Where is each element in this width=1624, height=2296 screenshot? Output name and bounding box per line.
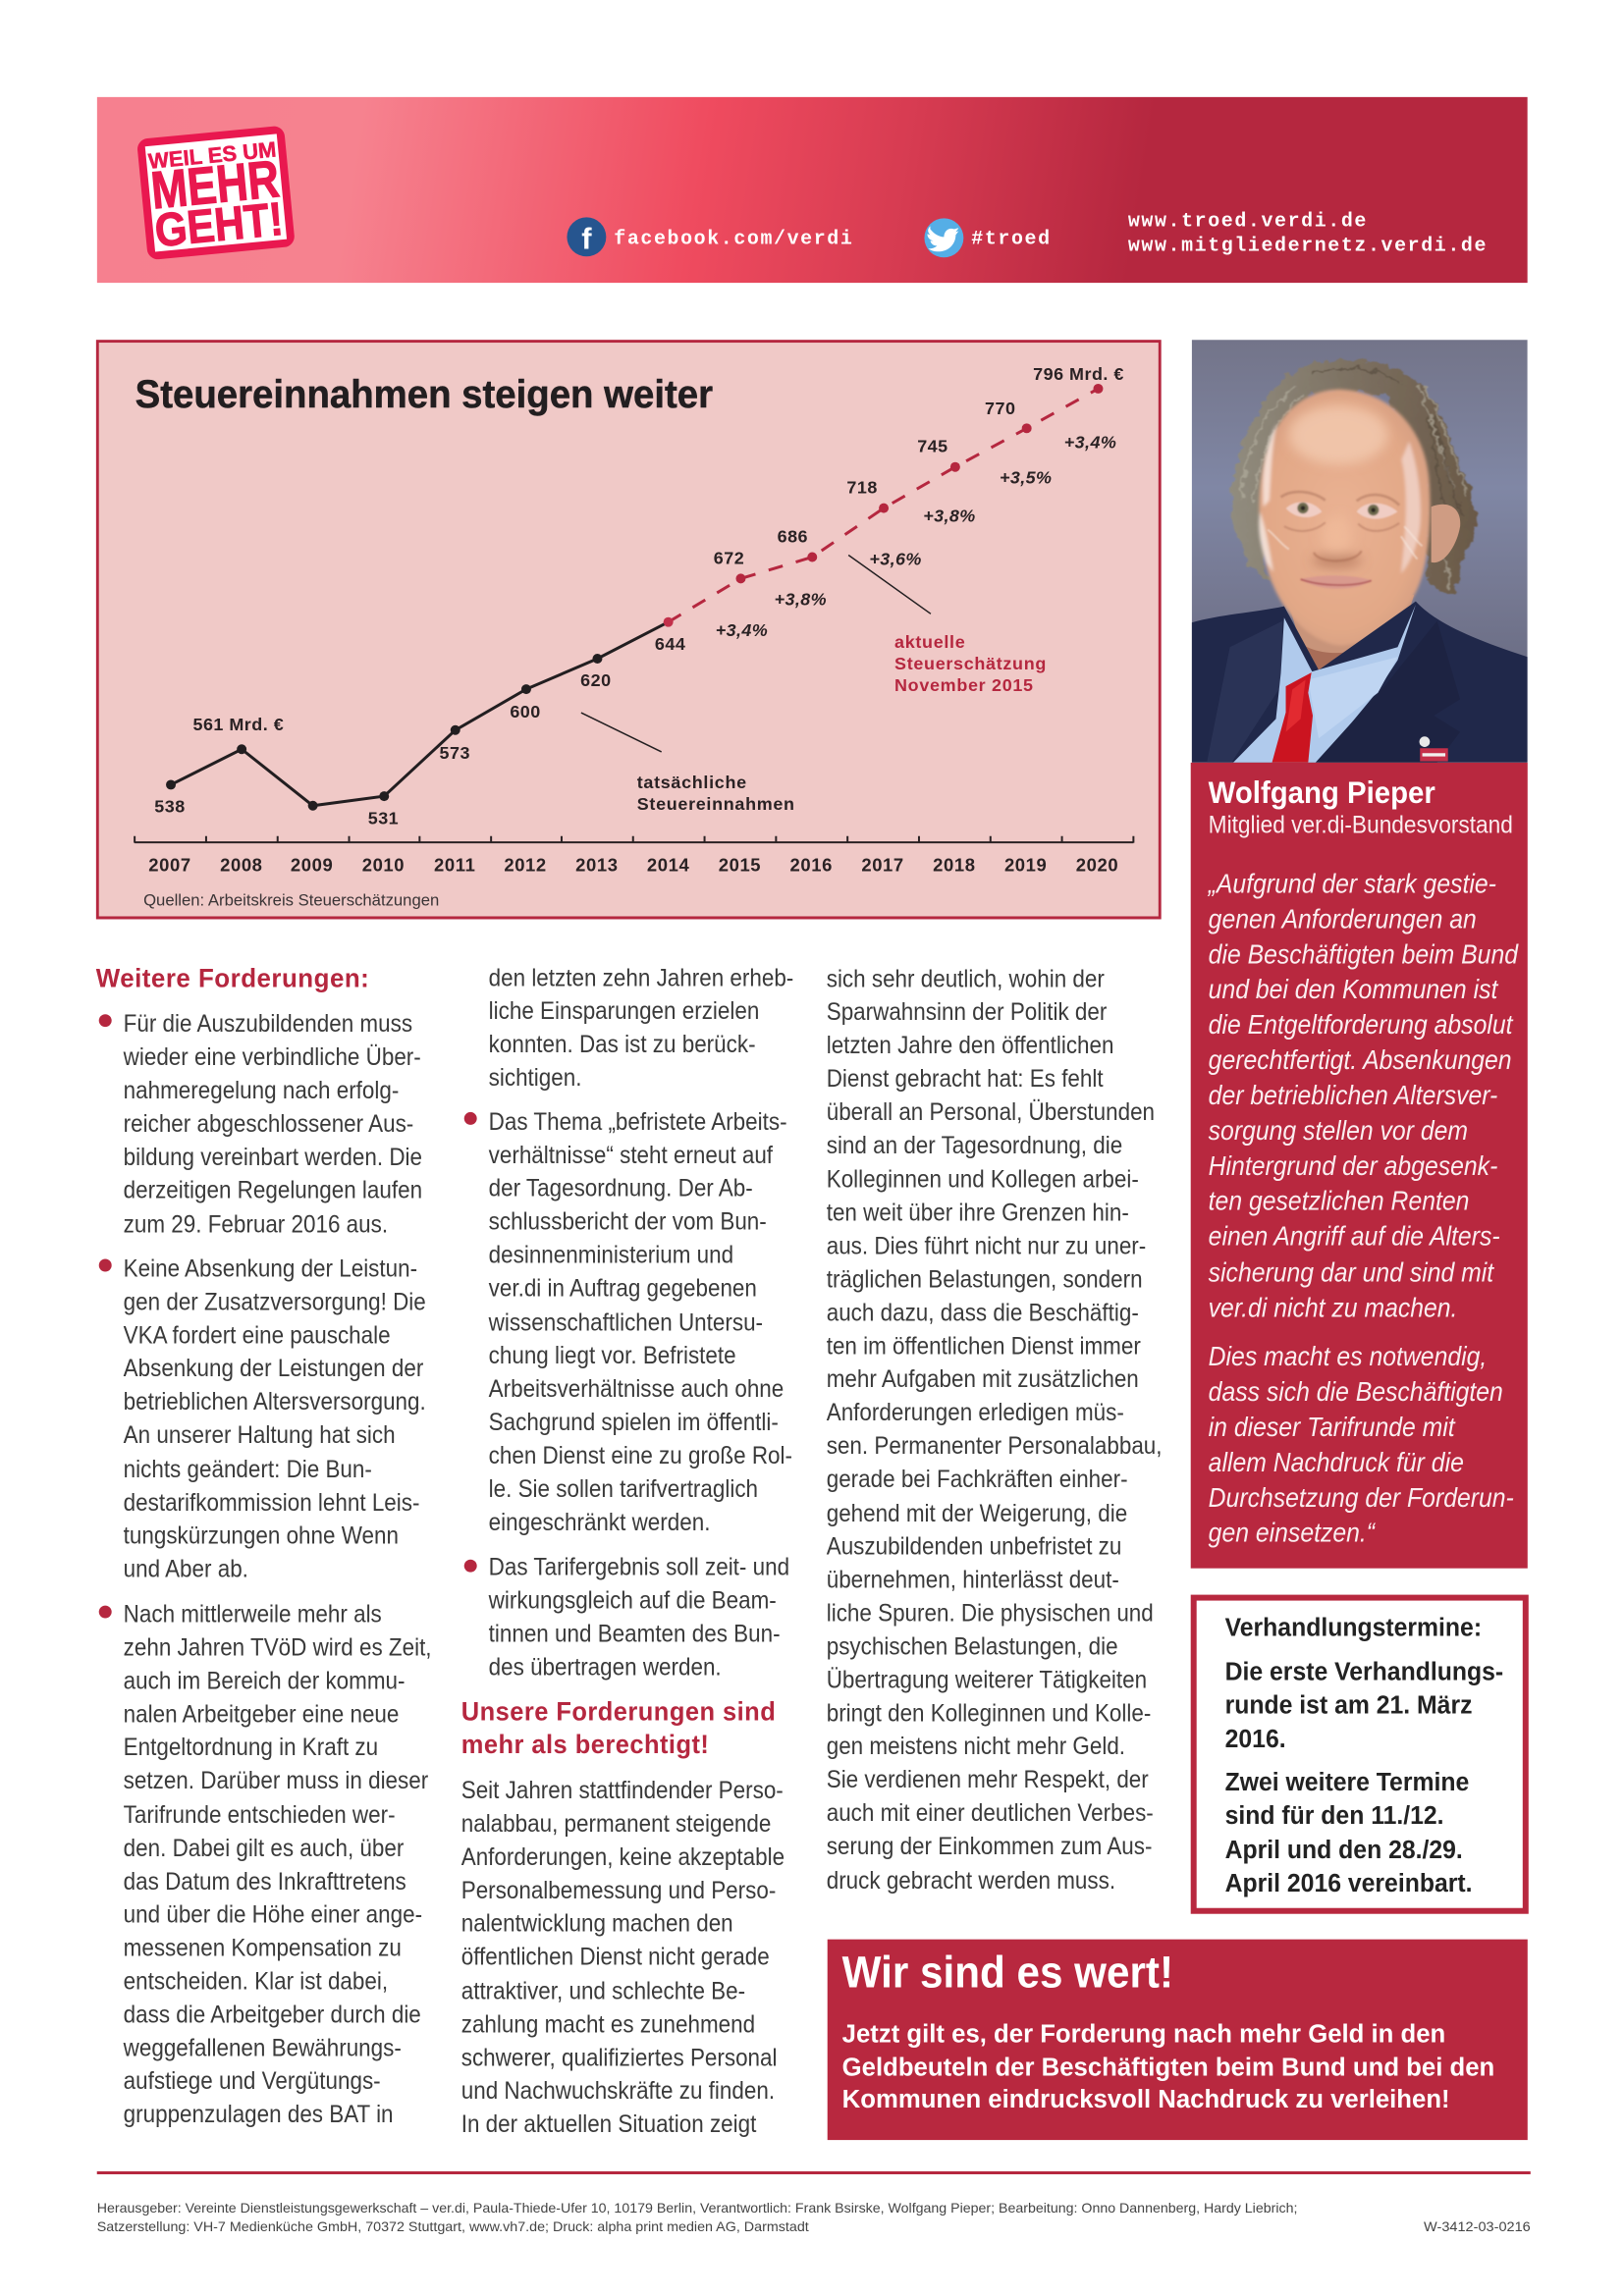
callout: actual revenue: Steuereinnahmen — [637, 794, 795, 814]
value labels: 672 — [714, 548, 744, 567]
line: estimated revenue — [664, 384, 1103, 627]
year labels: 2008 — [220, 855, 263, 876]
panel: negotiation dates — [1191, 1595, 1529, 1914]
year labels: 2010 — [362, 855, 405, 876]
column 3: sich sehr deutlich, wohin der Sparwahnsinn der Politik der letzten Jahre den öffentlichen Dienst gebracht hat: Es fehlt überall an Personal, Überstunden sind an der Tagesordnung, die Kolleginnen und Kollegen arbei- ten weit über ihre Grenzen hin- aus. Dies führt nicht nur zu uner- träglichen Belastungen, sondern auch dazu, dass die Beschäftig- ten im öffentlichen Dienst immer mehr Aufgaben mit zusätzlichen Anforderungen erledigen müs- sen. Permanenter Personalabbau, gerade bei Fachkräften einher- gehend mit der Weigerung, die Auszubildenden unbefristet zu übernehmen, hinterlässt deut- liche Spuren. Die physischen und psychischen Belastungen, die Übertragung weiterer Tätigkeiten bringt den Kolleginnen und Kolle- gen meistens nicht mehr Geld. Sie verdienen mehr Respekt, der auch mit einer deutlichen Verbes- serung der Einkommen zum Aus- druck gebracht werden muss. — [827, 965, 1163, 1894]
imprint: W-3412-03-0216 — [1424, 2218, 1531, 2234]
value labels: 600 — [510, 702, 541, 721]
bullet 4 — [464, 1112, 477, 1125]
eyes — [1268, 492, 1423, 561]
role: Mitglied ver.di-Bundesvorstand — [1209, 812, 1513, 839]
callout: current estimate — [848, 555, 1047, 695]
imprint: Satzerstellung: VH-7 Medienküche GmbH, 70372 Stuttgart, www.vh7.de; Druck: alpha print medien AG, Darmstadt — [97, 2218, 809, 2234]
year labels — [148, 855, 1118, 876]
body paragraph: Seit Jahren stattfindender Perso- nalabbau, permanent steigende Anforderungen, keine akzeptable Personalbemessung und Perso- nalentwicklung machen den öffentlichen Dienst nicht gerade attraktiver, und schlechte Be- zahlung macht es zunehmend schwerer, qualifiziertes Personal und Nachwuchskräfte zu finden. In der aktuellen Situation zeigt — [461, 1777, 785, 2138]
icon: facebook — [567, 217, 606, 256]
value labels: 538 — [154, 797, 186, 817]
source note: Quellen: Arbeitskreis Steuerschätzungen — [143, 892, 439, 910]
subheading: Unsere Forderungen sind mehr als berechtigt! — [461, 1696, 776, 1759]
panel: quote box — [1191, 763, 1528, 1569]
web addresses: www.troed.verdi.de — [1128, 209, 1368, 232]
icon: facebook: f — [581, 221, 592, 255]
icon: twitter — [924, 218, 963, 257]
value labels: 561 Mrd. € — [192, 715, 284, 734]
portrait photo — [1192, 340, 1528, 763]
column 1 — [98, 1010, 432, 2129]
line: actual revenue — [166, 622, 669, 811]
year labels: 2016 — [790, 855, 833, 876]
value labels — [154, 364, 1124, 828]
value labels: 573 — [440, 743, 470, 763]
name: Wolfgang Pieper — [1209, 774, 1435, 810]
logo: Weil es um mehr geht: WEIL ES UM — [147, 136, 277, 174]
year labels: 2020 — [1076, 855, 1118, 876]
year labels: 2011 — [434, 855, 475, 876]
line chart — [135, 364, 1133, 876]
imprint: Herausgeber: Vereinte Dienstleistungsgewerkschaft – ver.di, Paula-Thiede-Ufer 10, 10179 Berlin, Verantwortlich: Frank Bsirske, Wolfgang Pieper; Bearbeitung: Onno Dannenberg, Hardy Liebrich; — [97, 2200, 1297, 2216]
value labels: 745 — [917, 437, 948, 456]
growth percentages: +3,8% — [775, 589, 827, 609]
heading: dates: Verhandlungstermine: — [1225, 1613, 1482, 1641]
bullet 2 — [99, 1259, 112, 1271]
mouth — [1301, 575, 1372, 589]
call to action heading: Wir sind es wert! — [842, 1947, 1173, 1997]
twitter hashtag: #troed — [971, 227, 1052, 249]
year labels: 2013 — [575, 855, 619, 876]
year labels: 2015 — [719, 855, 761, 876]
year labels: 2007 — [148, 855, 191, 876]
logo: Weil es um mehr geht — [136, 126, 296, 260]
heading: further demands: Weitere Forderungen: — [96, 963, 369, 992]
logo: Weil es um mehr geht: GEHT! — [153, 193, 286, 257]
year labels: 2009 — [291, 855, 333, 876]
further dates: Zwei weitere Termine sind für den 11./12. April und den 28./29. April 2016 vereinbart. — [1225, 1767, 1473, 1897]
bullet 5 — [464, 1560, 477, 1573]
lapel — [1316, 621, 1460, 763]
callout: current estimate: Steuerschätzung — [894, 654, 1047, 673]
panel: tax revenue chart — [96, 340, 1162, 919]
call to action text: Jetzt gilt es, der Forderung nach mehr Geld in den Geldbeuteln der Beschäftigten beim Bund und bei den Kommunen eindrucksvoll Nachdruck zu verleihen! — [842, 2018, 1494, 2114]
quote text part 1: „Aufgrund der stark gestie- genen Anforderungen an die Beschäftigten beim Bund und bei den Kommunen ist die Entgeltforderung absolut gerechtfertigt. Absenkungen der betrieblichen Altersver- sorgung stellen vor dem Hintergrund der abgesenk- ten gesetzlichen Renten einen Angriff auf die Alters- sicherung dar und sind mit ver.di nicht zu machen. — [1209, 869, 1518, 1322]
value labels: 644 — [655, 634, 685, 654]
footer rule — [97, 2171, 1531, 2174]
logo: Weil es um mehr geht: MEHR — [148, 149, 282, 221]
web addresses — [1128, 209, 1488, 256]
year labels: 2019 — [1004, 855, 1047, 876]
pin — [1420, 736, 1448, 762]
value labels: 718 — [846, 478, 878, 498]
year labels: 2014 — [647, 855, 690, 876]
chart title: Steuereinnahmen steigen weiter — [135, 373, 713, 416]
shirt — [1233, 605, 1416, 763]
bullet 1 — [99, 1014, 112, 1027]
header banner — [96, 96, 1528, 1562]
face shading — [1289, 405, 1387, 566]
tie — [1272, 672, 1313, 763]
face — [1259, 390, 1431, 646]
demand: apprentices: Für die Auszubildenden muss wieder eine verbindliche Über- nahmeregelung nach erfolg- reicher abgeschlossener Aus- bildung vereinbart werden. Die derzeitigen Regelungen laufen zum 29. Februar 2016 aus. — [124, 1010, 422, 1238]
continued paragraph: den letzten zehn Jahren erheb- liche Einsparungen erzielen konnten. Das ist zu berück- sichtigen. — [489, 964, 793, 1092]
jacket — [1192, 602, 1528, 763]
demand: transfer to civil servants: Das Tarifergebnis soll zeit- und wirkungsgleich auf die Beam- tinnen und Beamten des Bun- des übertragen werden. — [489, 1554, 789, 1682]
demand: supplementary pension: Keine Absenkung der Leistun- gen der Zusatzversorgung! Die VKA fordert eine pauschale Absenkung der Leistungen der betrieblichen Altersversorgung. An unserer Haltung hat sich nichts geändert: Die Bun- destarifkommission lehnt Leis- tungskürzungen ohne Wenn und Aber ab. — [124, 1255, 426, 1582]
callout: actual revenue — [581, 713, 795, 814]
quote text part 2: Dies macht es notwendig, dass sich die Beschäftigten in dieser Tarifrunde mit allem Nachdruck für die Durchsetzung der Forderun- gen einsetzen.“ — [1209, 1341, 1514, 1548]
value labels: 770 — [985, 399, 1015, 418]
growth percentages — [716, 433, 1116, 640]
first date: Die erste Verhandlungs- runde ist am 21. März 2016. — [1225, 1656, 1503, 1753]
year labels: 2017 — [861, 855, 904, 876]
growth percentages: +3,4% — [1064, 433, 1116, 453]
growth percentages: +3,8% — [923, 507, 976, 526]
growth percentages: +3,5% — [1000, 468, 1052, 488]
column 2 — [461, 964, 793, 2138]
demand: fixed-term contracts: Das Thema „befristete Arbeits- verhältnisse“ steht erneut auf der Tagesordnung. Der Ab- schlussbericht der vom Bun- desinnenministerium und ver.di in Auftrag gegebenen wissenschaftlichen Untersu- chung liegt vor. Befristete Arbeitsverhältnisse auch ohne Sachgrund spielen im öffentli- chen Dienst eine zu große Rol- le. Sie sollen tarifvertraglich eingeschränkt werden. — [489, 1108, 792, 1536]
year labels: 2018 — [933, 855, 976, 876]
bullet 3 — [99, 1606, 112, 1619]
panel: call to action — [828, 1940, 1528, 2140]
hair — [1231, 359, 1476, 593]
web addresses: www.mitgliedernetz.verdi.de — [1128, 234, 1488, 256]
callout: current estimate: aktuelle — [894, 632, 965, 652]
year labels: 2012 — [504, 855, 547, 876]
growth percentages: +3,6% — [869, 549, 922, 568]
facebook address: facebook.com/verdi — [614, 227, 853, 249]
demand: new pay scale: Nach mittlerweile mehr als zehn Jahren TVöD wird es Zeit, auch im Bereich der kommu- nalen Arbeitgeber eine neue Entgeltordnung in Kraft zu setzen. Darüber muss in dieser Tarifrunde entschieden wer- den. Dabei gilt es auch, über das Datum des Inkrafttretens und über die Höhe einer ange- messenen Kompensation zu entscheiden. Klar ist dabei, dass die Arbeitgeber durch die weggefallenen Bewährungs- aufstiege und Vergütungs- gruppenzulagen des BAT in — [124, 1601, 432, 2129]
callout: current estimate: November 2015 — [894, 675, 1034, 695]
growth percentages: +3,4% — [716, 620, 768, 640]
value labels: 796 Mrd. € — [1033, 364, 1124, 384]
value labels: 686 — [778, 527, 808, 547]
imprint — [97, 2200, 1531, 2234]
callout: actual revenue: tatsächliche — [637, 773, 747, 792]
axis — [135, 836, 1133, 843]
neck — [1289, 595, 1414, 669]
value labels: 620 — [580, 670, 612, 690]
value labels: 531 — [368, 809, 399, 828]
ear — [1432, 505, 1460, 562]
